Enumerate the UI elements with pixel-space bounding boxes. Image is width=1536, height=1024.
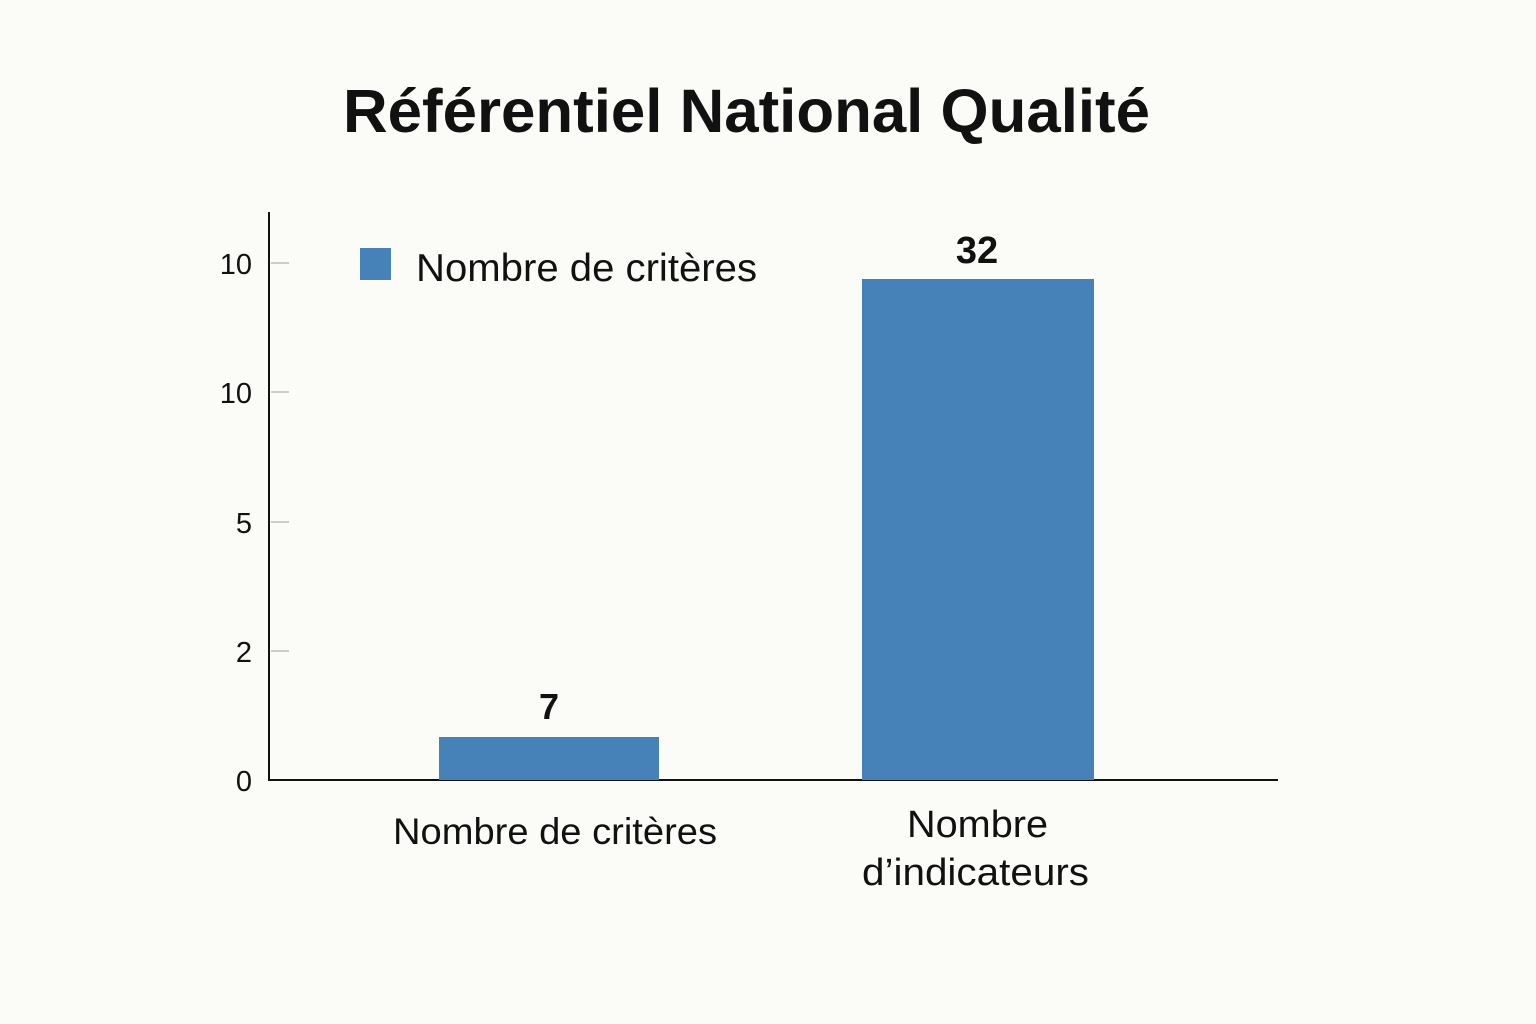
bar: critères xyxy=(439,686,659,780)
x label: indicateurs: Nombre xyxy=(907,804,1048,846)
legend: Nombre de critères xyxy=(416,247,757,290)
bar: indicateurs: 32 xyxy=(956,230,998,272)
y axis xyxy=(220,212,289,798)
title: Référentiel National Qualité xyxy=(343,77,1150,145)
y axis: 10 xyxy=(220,378,252,410)
x label: indicateurs xyxy=(862,804,1089,894)
bar chart xyxy=(220,212,1278,894)
x label: indicateurs: d’indicateurs xyxy=(862,852,1089,894)
bar: indicateurs xyxy=(862,230,1094,780)
y axis: 0 xyxy=(236,766,252,798)
bar: critères: 7 xyxy=(539,686,559,727)
y axis: 5 xyxy=(236,508,252,540)
x label: critères: Nombre de critères xyxy=(393,811,717,852)
y axis: 10 xyxy=(220,249,252,281)
y axis: 2 xyxy=(236,637,252,669)
x axis xyxy=(269,779,1278,781)
